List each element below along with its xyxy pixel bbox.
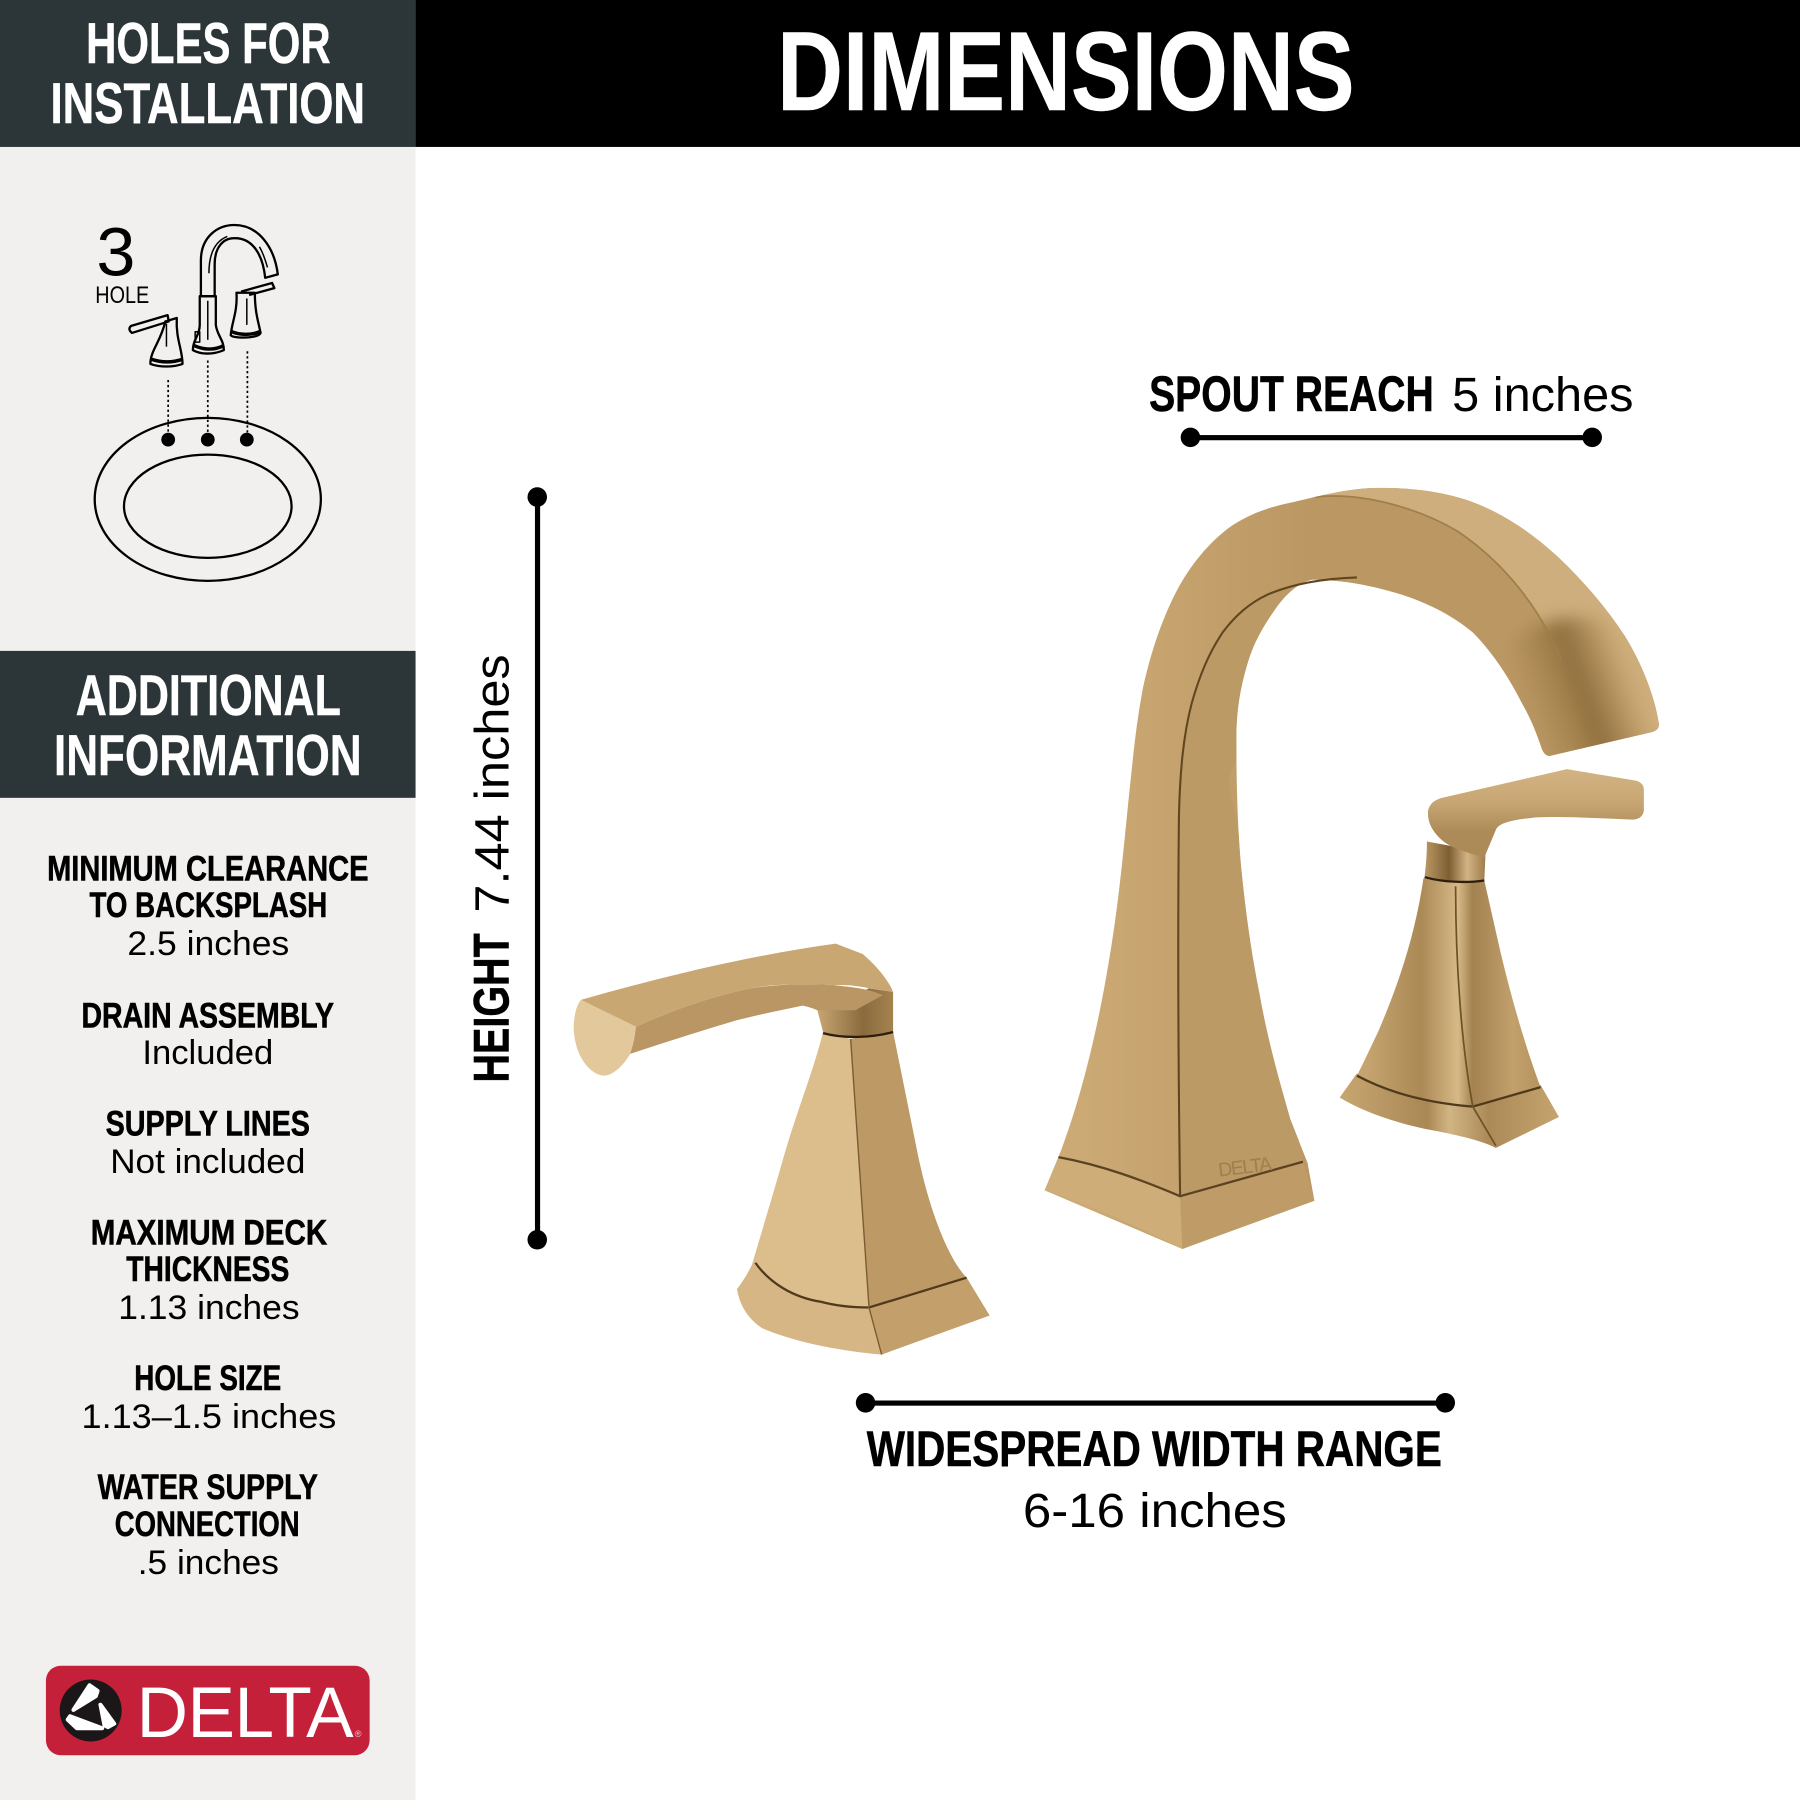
product: right handle [1340, 769, 1644, 1148]
spout body [1045, 488, 1659, 1249]
right handle seam [1456, 886, 1496, 1146]
logo: Delta: ® [355, 1729, 362, 1739]
spout inner shaded strip [1178, 579, 1355, 1200]
spout upper face [1314, 482, 1665, 735]
spec: minimum clearance: TO BACKSPLASH [90, 885, 327, 925]
sidebar background [0, 0, 416, 1800]
dimension: spout reach [1149, 365, 1634, 447]
number of holes label: 3 [96, 214, 135, 291]
panel header: holes for installation: INSTALLATION [51, 72, 365, 136]
spec: water supply connection: .5 inches [138, 1544, 279, 1582]
label: SPOUT REACH [1149, 365, 1434, 422]
spec: maximum deck thickness: MAXIMUM DECK [91, 1212, 327, 1252]
left handle base, right face [851, 1032, 990, 1355]
spout tip shading [1514, 610, 1659, 756]
left handle lever underside [630, 984, 883, 1054]
label: 6-16 inches [1023, 1484, 1287, 1538]
spec: supply lines: SUPPLY LINES [106, 1103, 310, 1143]
icon: three hole faucet and sink diagram [95, 214, 321, 581]
panel header: holes for installation [0, 0, 416, 147]
icon: dotted connectors [168, 351, 247, 443]
left handle base, left face [748, 1032, 869, 1314]
right handle base band [1340, 1073, 1559, 1148]
arrow [527, 487, 547, 1250]
icon: Delta triangle mark [60, 1679, 122, 1741]
spec: minimum clearance [47, 848, 368, 963]
spec: drain assembly [82, 995, 334, 1072]
title: DIMENSIONS [777, 8, 1355, 134]
arrow [1181, 428, 1602, 447]
number of holes label: HOLE [95, 282, 149, 309]
spec: minimum clearance: MINIMUM CLEARANCE [47, 848, 368, 888]
spec: minimum clearance: 2.5 inches [127, 925, 289, 963]
spec: hole size: HOLE SIZE [134, 1358, 281, 1398]
label: 5 inches [1452, 368, 1634, 422]
left handle lever top face [581, 944, 893, 1027]
icon: left handle [129, 315, 183, 366]
left handle neck [817, 988, 893, 1037]
top title bar [416, 0, 1800, 147]
label [867, 1420, 1442, 1538]
spec: hole size: 1.13–1.5 inches [82, 1398, 336, 1436]
spec: maximum deck thickness: THICKNESS [126, 1249, 289, 1289]
spout base band [1045, 1157, 1182, 1249]
spout top seam [1314, 495, 1548, 630]
arrow [856, 1393, 1455, 1413]
logo: Delta: DELTA [137, 1674, 354, 1753]
spec: drain assembly: Included [142, 1034, 273, 1072]
spec: drain assembly: DRAIN ASSEMBLY [82, 995, 334, 1035]
logo: Delta [46, 1666, 370, 1755]
label: 7.44 inches [466, 654, 520, 913]
panel header: holes for installation: HOLES FOR [86, 12, 331, 76]
panel header: additional information [0, 651, 416, 798]
label [463, 654, 520, 1083]
product: faucet spout [1045, 482, 1676, 1249]
spec: maximum deck thickness [91, 1212, 327, 1327]
spec: water supply connection [98, 1467, 318, 1582]
dimension: widespread width range [856, 1393, 1455, 1538]
right handle lever [1428, 769, 1644, 858]
right handle base [1352, 878, 1541, 1116]
label: HEIGHT [463, 933, 520, 1083]
panel header: additional information: ADDITIONAL [76, 664, 341, 728]
panel header: additional information: INFORMATION [54, 724, 362, 788]
number of holes label [95, 214, 149, 309]
engraved brand mark: DELTA [1217, 1153, 1273, 1182]
icon: centre spout [193, 225, 278, 354]
label: WIDESPREAD WIDTH RANGE [867, 1420, 1442, 1477]
icon: sink bowl [95, 418, 321, 581]
spec: maximum deck thickness: 1.13 inches [118, 1289, 300, 1327]
product: left handle [574, 944, 990, 1355]
icon: mounting holes [161, 433, 254, 447]
left handle lever end cap [574, 1000, 636, 1076]
icon: right handle [231, 283, 274, 338]
spec: water supply connection: WATER SUPPLY [98, 1467, 318, 1507]
spec: water supply connection: CONNECTION [115, 1504, 300, 1544]
right handle neck [1425, 841, 1485, 882]
spout dark seam [1178, 577, 1357, 1196]
dimension: height [463, 487, 547, 1250]
left handle base band [737, 1263, 882, 1355]
spec: supply lines: Not included [110, 1143, 305, 1181]
spec: hole size [82, 1358, 336, 1436]
spec: supply lines [106, 1103, 310, 1181]
spout shading [1178, 482, 1676, 1200]
